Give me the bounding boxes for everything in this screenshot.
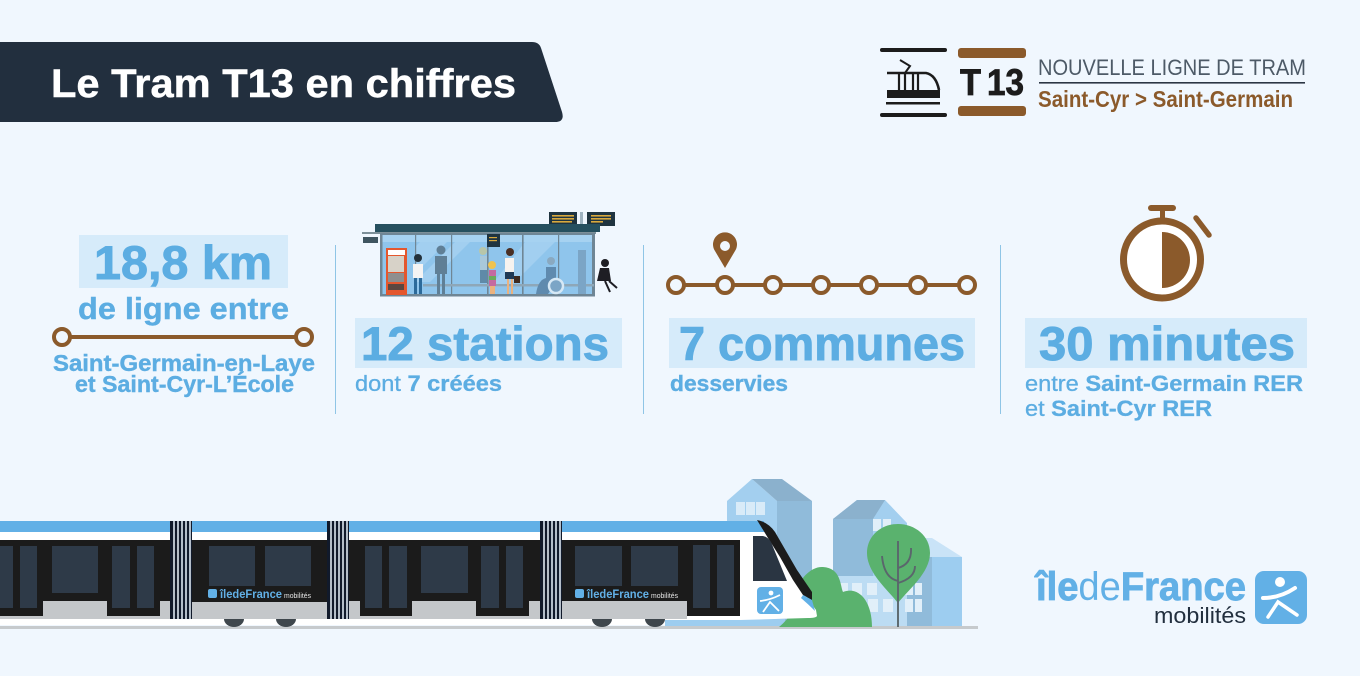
- illustration: tram: [0, 520, 817, 627]
- stat: communes: desservies: [670, 371, 788, 396]
- tram side logo 1: mobilités: [284, 593, 311, 600]
- person: seated woman: [597, 259, 617, 292]
- person: standing figure behind glass: [479, 247, 487, 283]
- stat: communes: 7 communes: [679, 317, 965, 370]
- tram side logo 1: [208, 587, 311, 601]
- logo subtitle: mobilités: [1154, 603, 1246, 628]
- line number: T: [960, 62, 981, 103]
- person: man in suit: [435, 246, 447, 294]
- illustration: bushes: [779, 567, 872, 627]
- tram nose logo: [757, 587, 783, 614]
- blue strip beneath tram: [665, 619, 785, 626]
- illustration: tram shelter: [362, 212, 617, 296]
- tram windshield: [753, 536, 787, 581]
- logo wordmark: îledeFrance: [1034, 565, 1246, 609]
- tram black side panels: [0, 540, 740, 616]
- illustration: tree: [867, 524, 930, 627]
- tram white body: [0, 532, 817, 625]
- building left: [727, 479, 812, 626]
- icon: stopwatch: [1124, 205, 1209, 298]
- line route: Saint-Cyr > Saint-Germain: [1038, 86, 1293, 112]
- header: T13 line logo: [880, 48, 1306, 117]
- tram side logo 2: mobilités: [651, 593, 678, 600]
- tram side logo 2: [575, 587, 678, 601]
- stat: travel time: [1025, 317, 1307, 421]
- person: woman: [505, 248, 520, 294]
- stat: line length: 18,8 km: [94, 236, 272, 289]
- tram windows: [0, 545, 734, 608]
- stat: line length: Saint-Germain-en-Laye: [53, 350, 315, 376]
- illustration: buildings: [665, 479, 962, 626]
- route line: [54, 329, 312, 345]
- building centre: [833, 500, 922, 626]
- stat: communes: [669, 317, 975, 396]
- logo: Île-de-France Mobilités: [1034, 565, 1307, 628]
- stat: travel time: et Saint-Cyr RER: [1025, 396, 1212, 421]
- stat: travel time: 30 minutes: [1039, 317, 1295, 370]
- stat: stations: [355, 317, 622, 396]
- building back right: [900, 538, 962, 626]
- stat: stations: dont 7 créées: [355, 371, 502, 396]
- ground line: [0, 626, 978, 629]
- tram side logo 1: îledeFrance: [219, 587, 282, 601]
- tram wheels: [224, 619, 665, 627]
- vending machine: [386, 248, 407, 295]
- tram articulation joints: [170, 521, 562, 619]
- tram grey lower panels: [0, 601, 687, 619]
- person: girl: [488, 261, 496, 294]
- tram front black edge: [757, 520, 812, 600]
- brown bars: [958, 48, 1026, 116]
- stat: stations: 12 stations: [361, 317, 609, 370]
- stat: travel time: entre Saint-Germain RER: [1025, 371, 1303, 396]
- tram side logo 2: îledeFrance: [586, 587, 649, 601]
- stat: line length: de ligne entre: [78, 291, 289, 326]
- line number: 13: [987, 62, 1024, 103]
- person: wheelchair user: [536, 257, 563, 294]
- logo icon: [1255, 571, 1307, 624]
- tram roof band: [0, 521, 764, 532]
- route with seven stops: [668, 277, 975, 293]
- icon: location pin: [713, 232, 737, 268]
- stat: line length: et Saint-Cyr-L’École: [75, 370, 294, 397]
- title banner: [0, 42, 563, 122]
- title banner: Le Tram T13 en chiffres: [51, 62, 516, 106]
- line tagline: NOUVELLE LIGNE DE TRAM: [1038, 55, 1306, 80]
- icon: tram pictogram: [880, 48, 947, 117]
- stat: line length: [53, 235, 315, 397]
- person: boy: [413, 254, 423, 294]
